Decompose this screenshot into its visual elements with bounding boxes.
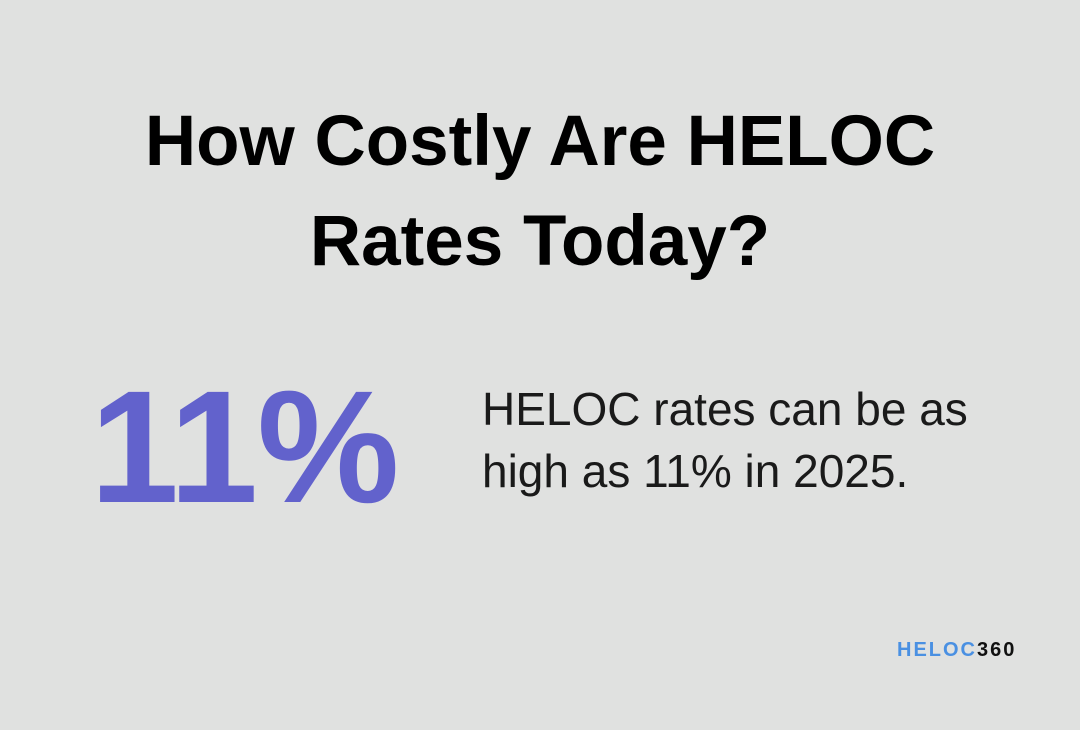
logo: HELOC360 bbox=[897, 639, 1016, 661]
title: Rates Today? bbox=[310, 202, 770, 281]
title: How Costly Are HELOC bbox=[145, 102, 935, 181]
description: HELOC rates can be as bbox=[482, 383, 968, 435]
description: high as 11% in 2025. bbox=[482, 445, 908, 497]
title bbox=[145, 102, 935, 281]
big stat: 11% bbox=[90, 357, 398, 536]
description bbox=[482, 383, 968, 497]
